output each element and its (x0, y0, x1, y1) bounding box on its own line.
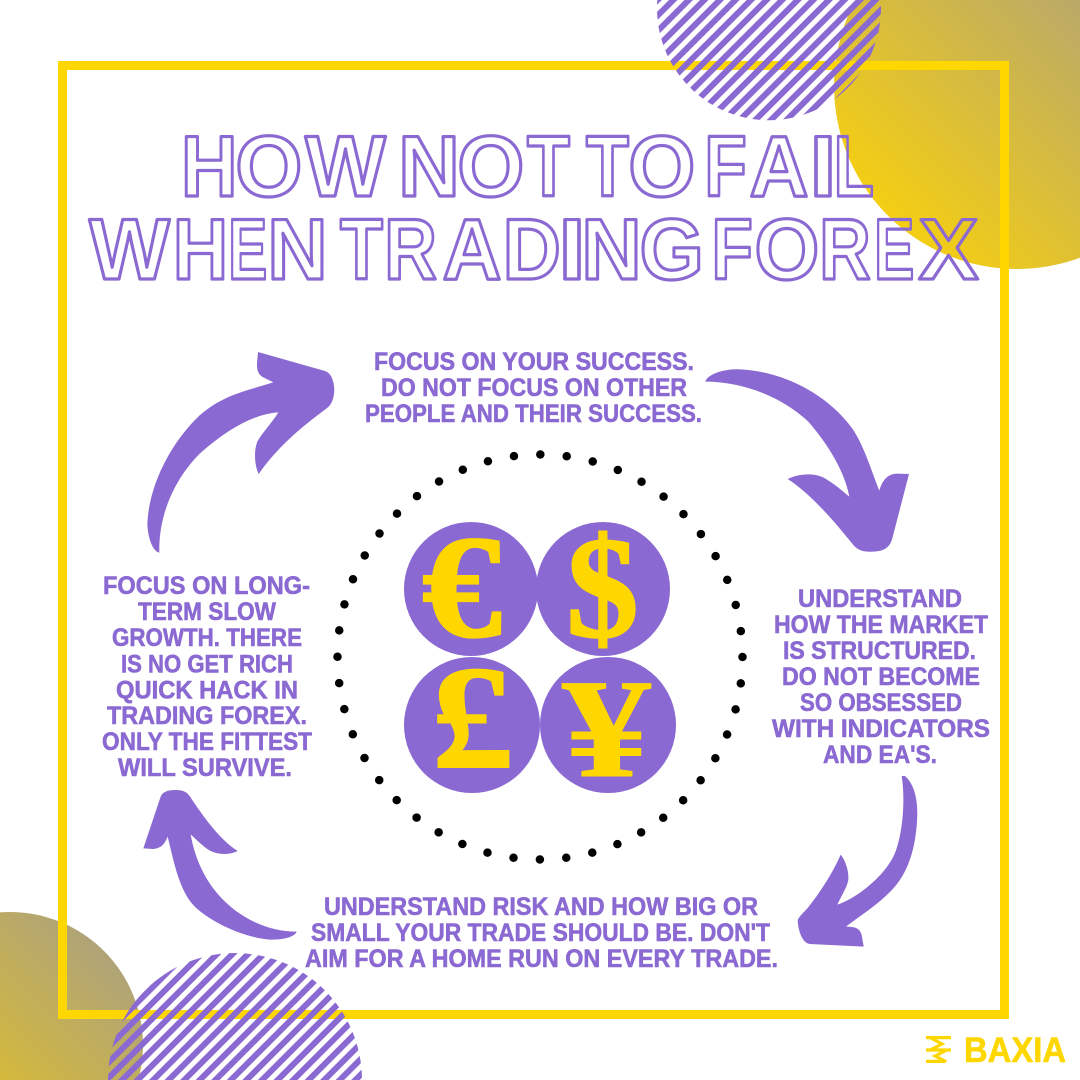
text block: understand risk: SMALL YOUR TRADE SHOULD BE. DON'T (311, 919, 770, 947)
hatched circle bottom (108, 953, 362, 1080)
title: A (750, 119, 808, 215)
text block: understand the market: UNDERSTAND (798, 585, 962, 613)
hatched circle top (657, 0, 881, 120)
title: F (712, 202, 753, 298)
title: X (918, 202, 978, 298)
text block: long-term slow growth: GROWTH. THERE (112, 624, 302, 652)
title: O (457, 119, 524, 215)
title (89, 119, 979, 298)
title: L (834, 119, 874, 215)
title: A (442, 202, 502, 298)
text block: understand risk: UNDERSTAND RISK AND HOW BIG OR (324, 893, 758, 921)
arrow: bottom left (143, 790, 297, 940)
logo: BAXIA (926, 1031, 1066, 1070)
arrow: top left (147, 352, 334, 553)
text block: long-term slow growth: QUICK HACK IN (116, 676, 298, 704)
text block: understand the market: HOW THE MARKET (774, 611, 988, 639)
gold circle bottom left (0, 912, 143, 1080)
yellow frame (62, 66, 1004, 1014)
logo: BAXIA: BAXIA (964, 1031, 1066, 1070)
text block: focus on your success: FOCUS ON YOUR SUCCESS. (374, 348, 694, 376)
title: R (384, 202, 437, 298)
title: T (340, 202, 383, 298)
title: E (874, 202, 914, 298)
text block: understand the market: DO NOT BECOME (782, 663, 980, 691)
title: F (704, 119, 747, 215)
text block: long-term slow growth: FOCUS ON LONG- (103, 572, 310, 600)
coin: euro (404, 507, 538, 669)
text block: understand the market: IS STRUCTURED. (783, 637, 976, 665)
title: O (754, 202, 819, 298)
title: N (267, 202, 328, 298)
coin: yen: ¥ (562, 650, 652, 807)
title: O (628, 119, 695, 215)
title: T (586, 119, 629, 215)
title: H (173, 202, 228, 298)
coin: dollar (536, 508, 670, 668)
text block: focus on your success: DO NOT FOCUS ON OTHER (381, 374, 687, 402)
arrow: top right (705, 369, 909, 552)
text block: long-term slow growth: WILL SURVIVE. (118, 754, 292, 782)
title: T (527, 119, 570, 215)
dotted ring (338, 454, 742, 860)
text block: understand the market: AND EA'S. (823, 741, 937, 769)
text block: understand the market: SO OBSESSED (800, 689, 962, 717)
title: O (235, 119, 302, 215)
gold circle top right (834, 0, 1080, 269)
text block: long-term slow growth (102, 572, 312, 782)
title: I (558, 202, 586, 298)
title: H (181, 119, 238, 215)
coin: pound: £ (432, 636, 513, 799)
arrow: bottom right (798, 776, 917, 947)
text block: focus on your success: PEOPLE AND THEIR SUCCESS. (365, 400, 702, 428)
title: N (581, 202, 642, 298)
title: R (819, 202, 871, 298)
title: W (89, 202, 171, 298)
text block: understand risk (305, 893, 778, 973)
text block: long-term slow growth: ONLY THE FITTEST (102, 728, 312, 756)
text block: understand risk: AIM FOR A HOME RUN ON EVERY TRADE. (305, 945, 778, 973)
title: G (640, 202, 704, 298)
text block: long-term slow growth: TERM SLOW (138, 598, 276, 626)
text block: understand the market (772, 585, 990, 769)
icon: logo mark (926, 1038, 951, 1061)
text block: focus on your success (365, 348, 702, 428)
title: I (810, 119, 836, 215)
title: D (503, 202, 561, 298)
text block: long-term slow growth: IS NO GET RICH (121, 650, 293, 678)
text block: long-term slow growth: TRADING FOREX. (107, 702, 307, 730)
title: E (228, 202, 267, 298)
coin: yen (540, 650, 676, 807)
coin: euro: € (422, 507, 502, 669)
title: N (398, 119, 460, 215)
coin: dollar: $ (566, 508, 639, 668)
text block: understand the market: WITH INDICATORS (772, 715, 990, 743)
title: W (305, 119, 387, 215)
coin: pound (404, 636, 540, 799)
